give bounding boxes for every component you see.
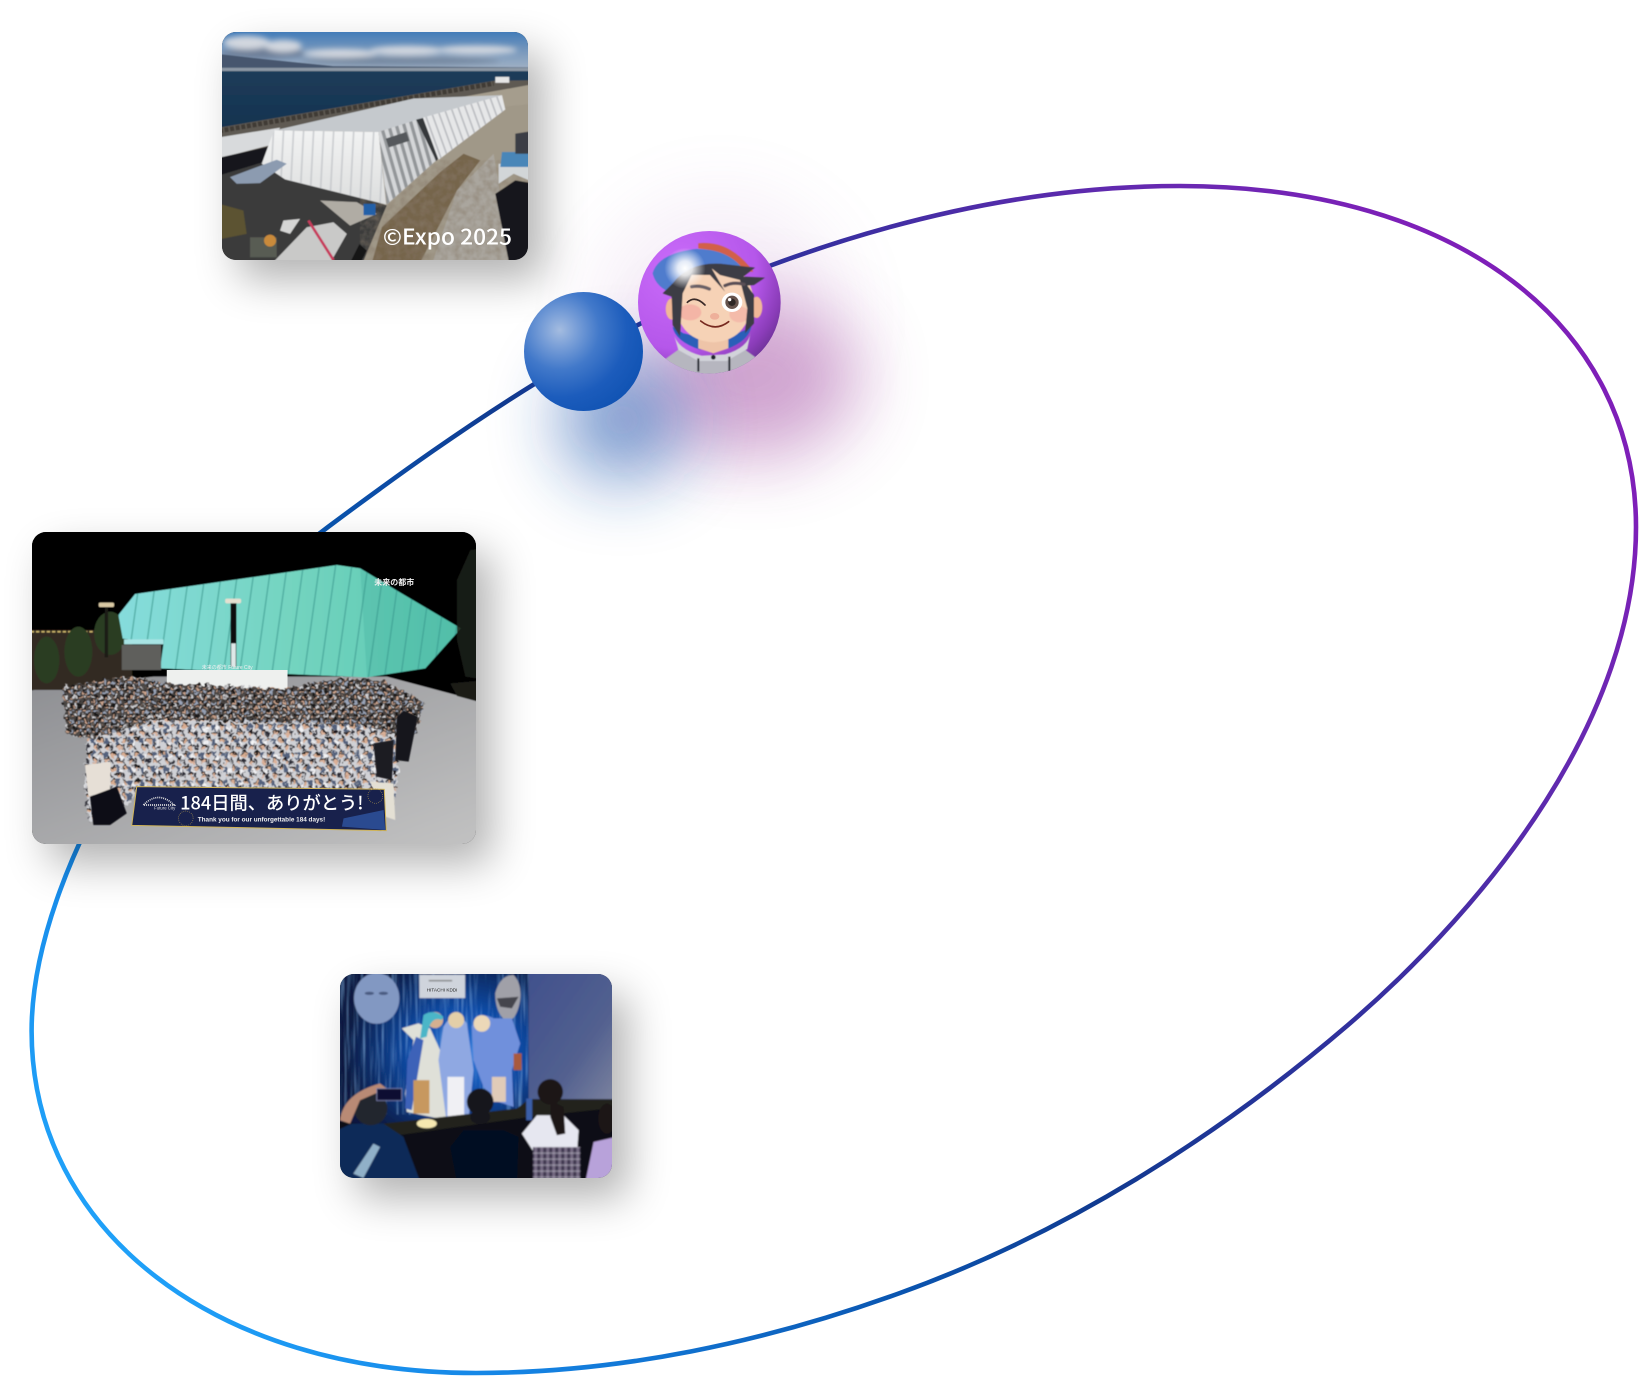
avatar: winking character in purple circle [638, 231, 781, 374]
highlight [664, 248, 706, 289]
photo: performers on stage with audience [340, 974, 612, 1178]
sign: pavilion name: 未来の都市 [374, 577, 414, 587]
caption: copyright: ©Expo 2025 [383, 220, 512, 251]
eyebrows [692, 286, 709, 289]
sign: event board: HITACHI KDDI [427, 987, 457, 992]
hair [663, 264, 765, 337]
banner: thanks message: 184日間、ありがとう! [180, 790, 364, 816]
banner: thanks message [132, 787, 386, 831]
photo: pavilion exterior daytime [222, 32, 528, 260]
banner: thanks message: Future City [154, 805, 176, 810]
jacket [666, 349, 756, 374]
blue sphere [524, 292, 643, 411]
collar [673, 327, 751, 350]
photo: group at illuminated pavilion at night [32, 532, 476, 844]
neck [697, 338, 730, 354]
face [675, 267, 753, 342]
wink [687, 299, 705, 305]
banner: thanks message: Thank you for our unforgettable 184 days! [198, 816, 325, 823]
sign: future city label: 未来の都市 Future City [202, 664, 253, 671]
cap and stripe [698, 243, 753, 272]
ears [665, 298, 674, 320]
open eye [722, 293, 742, 312]
smile [701, 321, 729, 327]
